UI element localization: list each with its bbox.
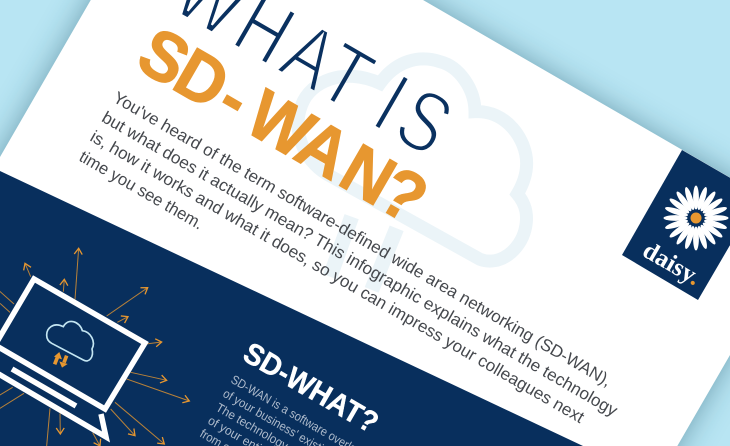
icon: up and down arrows (54, 352, 68, 368)
logo wordmark: daisy. (638, 237, 705, 291)
logo: daisy (622, 150, 730, 300)
logo background (622, 150, 730, 300)
intro paragraph: You've heard of the term software-defined wide area networking (SD-WAN), (110, 88, 615, 390)
heading: sd-what: SD-WHAT? (238, 336, 384, 440)
panel: sd-what (0, 171, 583, 446)
icon: small cloud (47, 321, 93, 361)
title: SD-WAN?: SD-WAN? (125, 12, 441, 239)
intro paragraph: but what does it actually mean? This infographic explains what the technology (99, 108, 621, 420)
intro paragraph: is, how it works and what it does, so you can impress your colleagues next (87, 127, 588, 427)
navy panel background (0, 171, 583, 446)
icon: cloud watermark (298, 59, 527, 290)
icon: radiating arrows (0, 248, 189, 446)
icon: daisy flower (664, 186, 728, 250)
intro paragraph: time you see them. (76, 147, 207, 233)
icon: laptop (0, 279, 145, 437)
